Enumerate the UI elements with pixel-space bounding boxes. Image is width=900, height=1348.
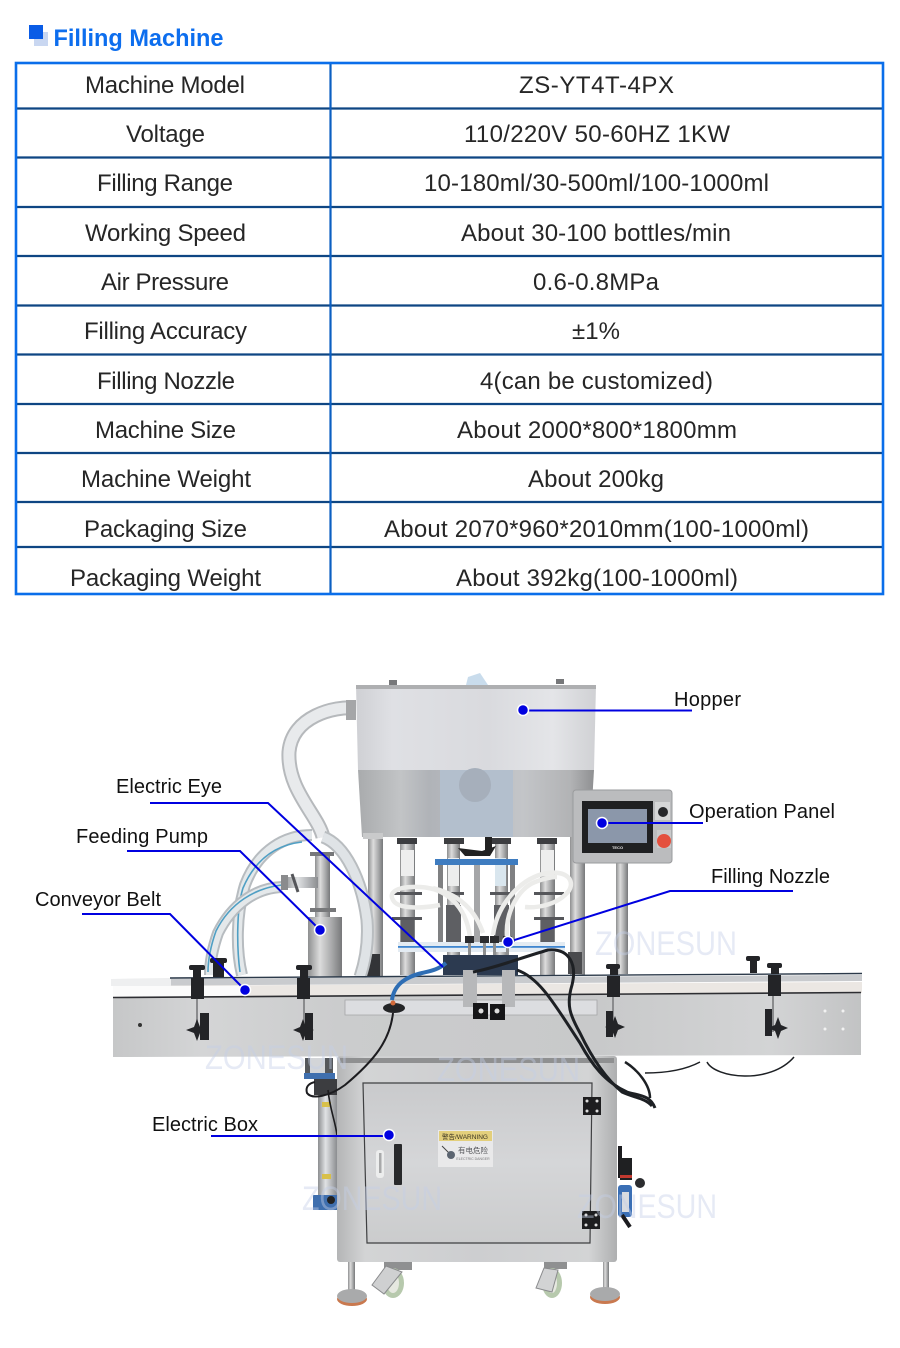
row: filling accuracy: Filling Accuracy: [84, 318, 247, 345]
filling nozzles and white tubes: [392, 873, 571, 1020]
row: packaging size: [84, 516, 809, 543]
callout: filling nozzle: [502, 866, 830, 948]
warning label: [438, 1130, 493, 1167]
row: air pressure: Air Pressure: [101, 269, 229, 296]
row: voltage: 110/220V 50-60HZ 1KW: [464, 121, 730, 148]
row: voltage: Voltage: [126, 121, 205, 148]
row: air pressure: [101, 269, 660, 296]
row: filling accuracy: ±1%: [572, 318, 620, 345]
watermarks: ZONESUN: [595, 925, 737, 963]
row: filling range: [97, 170, 769, 197]
feeding pump: [281, 852, 342, 977]
row: machine model: Machine Model: [85, 72, 245, 99]
watermarks: ZONESUN: [205, 1039, 348, 1077]
row: working speed: About 30-100 bottles/min: [461, 220, 731, 247]
row: working speed: [85, 220, 731, 247]
row: machine model: [85, 72, 674, 99]
callout: filling nozzle: Filling Nozzle: [711, 866, 830, 888]
title: [29, 25, 224, 52]
row: machine weight: Machine Weight: [81, 466, 251, 493]
callout: feeding pump: Feeding Pump: [76, 826, 208, 848]
warning label: 警告/WARNING: [442, 1132, 488, 1141]
table grid: [16, 63, 883, 594]
warning label: ELECTRIC DANGER: [456, 1157, 490, 1161]
row: machine size: [95, 417, 737, 444]
watermarks: ZONESUN: [437, 1051, 580, 1089]
callout: hopper: Hopper: [674, 689, 741, 711]
row: packaging weight: [70, 565, 738, 592]
callout: operation panel: [596, 801, 835, 828]
touch screen: [588, 809, 647, 843]
specification table: [16, 63, 883, 594]
callout: hopper: [518, 689, 741, 716]
row: filling nozzle: Filling Nozzle: [97, 368, 235, 395]
row: machine size: Machine Size: [95, 417, 236, 444]
row: packaging weight: Packaging Weight: [70, 565, 261, 592]
row: air pressure: 0.6-0.8MPa: [533, 269, 660, 296]
callout: electric box: Electric Box: [152, 1114, 258, 1136]
callout: electric eye: [116, 776, 443, 967]
operation panel: [573, 790, 672, 863]
emergency stop button: [657, 830, 671, 848]
row: machine model: ZS-YT4T-4PX: [519, 72, 674, 99]
air filter regulator: [618, 1146, 645, 1227]
icon: overlapping squares: [29, 25, 48, 46]
watermarks: ZONESUN: [302, 1180, 442, 1218]
guide clamps: [186, 956, 788, 1041]
callouts: [35, 689, 835, 1140]
control knob: [655, 802, 670, 820]
row: filling nozzle: [97, 368, 713, 395]
warning label: 有电危险: [458, 1145, 488, 1155]
row: filling accuracy: [84, 318, 620, 345]
machine illustration: [111, 673, 862, 1306]
pneumatic cylinder: [304, 1058, 338, 1210]
watermarks: [205, 925, 737, 1226]
callout: electric eye: Electric Eye: [116, 776, 222, 798]
row: voltage: [126, 121, 730, 148]
row: filling range: Filling Range: [97, 170, 233, 197]
watermarks: ZONESUN: [577, 1188, 717, 1226]
heading text: Filling Machine: [54, 25, 224, 52]
row: packaging size: Packaging Size: [84, 516, 247, 543]
callout: conveyor belt: Conveyor Belt: [35, 889, 161, 911]
callout: feeding pump: [76, 826, 326, 936]
row: machine weight: About 200kg: [528, 466, 664, 493]
cabinet door: [363, 1083, 592, 1243]
row: machine weight: [81, 466, 664, 493]
hoses: [208, 708, 367, 977]
callout: conveyor belt: [35, 889, 250, 996]
row: packaging weight: About 392kg(100-1000ml): [456, 565, 738, 592]
feet and casters: [337, 1262, 620, 1306]
row: packaging size: About 2070*960*2010mm(100-1000ml): [384, 516, 809, 543]
pipe fitting on conveyor: [383, 1000, 405, 1013]
row: working speed: Working Speed: [85, 220, 246, 247]
rear columns and pistons: [366, 828, 628, 977]
operation panel: TECO: [612, 845, 623, 850]
conveyor belt: [111, 974, 862, 1057]
callout: operation panel: Operation Panel: [689, 801, 835, 823]
air and signal cables: [307, 950, 794, 1108]
callout: electric box: [152, 1114, 394, 1140]
row: filling range: 10-180ml/30-500ml/100-1000ml: [424, 170, 769, 197]
hopper tank: [346, 673, 596, 839]
electric box cabinet: [337, 1056, 617, 1262]
door handle: [376, 1144, 402, 1185]
row: filling nozzle: 4(can be customized): [480, 368, 713, 395]
row: machine size: About 2000*800*1800mm: [457, 417, 737, 444]
door hinges: [582, 1097, 601, 1229]
